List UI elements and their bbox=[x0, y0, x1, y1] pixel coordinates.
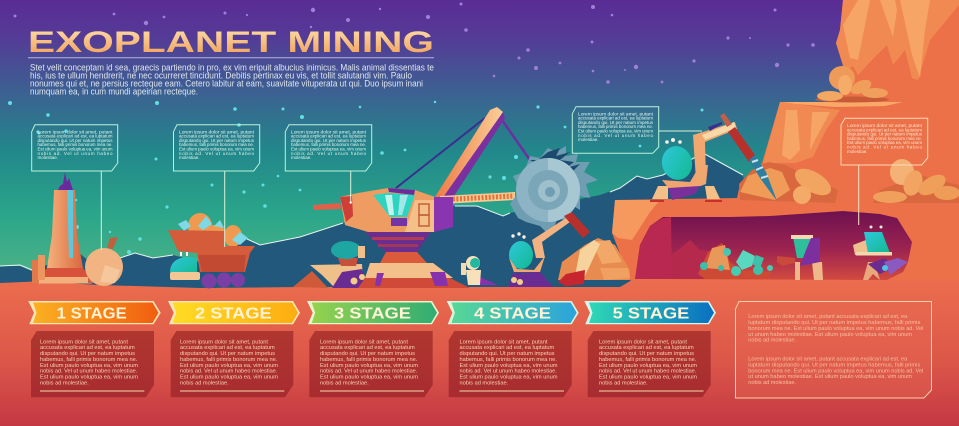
callout 2 text: molestiae. bbox=[179, 155, 200, 160]
ledge highlight bbox=[782, 102, 903, 107]
callout 3 text bbox=[291, 129, 367, 160]
conveyor belt bbox=[440, 192, 515, 204]
callout 1 bbox=[32, 125, 118, 250]
summary paragraph 2: ut unum habeo molestiae. Est ulium paulo voluptua ea, vim unum bbox=[748, 374, 912, 380]
intro paragraph: numquam ea, in cum mundi apeirian recteque. bbox=[30, 86, 198, 96]
drill bbox=[728, 127, 755, 162]
callout 3 text: disputando qui. Ut per natum impetus bbox=[291, 138, 367, 143]
stage 1 description: Est ulium paulo voluptua ea, vim unum bbox=[40, 374, 138, 380]
callout 1 text: accusata explicari ad est, ea luptatum bbox=[38, 134, 113, 139]
callout 4 text: habemus, falli primis bonorum mea ne. bbox=[578, 124, 653, 129]
cliff mid tone lower bbox=[763, 102, 840, 163]
robot arm bbox=[693, 122, 737, 180]
stars bbox=[8, 2, 815, 254]
stage 3 description: accusata explicari ad est, ea luptatum bbox=[320, 345, 415, 351]
cliff light streaks lower bbox=[782, 110, 830, 160]
stage 3 description: Est ulium paulo voluptua ea, vim unum bbox=[320, 374, 418, 380]
platform lip bbox=[612, 200, 660, 240]
stage 1 description: nobis ad molestiae. bbox=[40, 380, 89, 386]
callout 2 text: disputando qui. Ut per natum impetus bbox=[179, 138, 255, 143]
intro paragraph: Stet velit conceptam id sea, graecis partiendo in pro, ex vim eripuit albucius inimicus. Malis animal dissentias te bbox=[30, 62, 434, 72]
callout 5 text bbox=[847, 123, 923, 154]
stage 2 description: Est ulium paulo voluptua ea, vim unum bbox=[180, 374, 278, 380]
callout 5 text: nobis ad. Vel ut unum habeo bbox=[847, 144, 922, 150]
callout 4 text: accusata explicari ad est, ea luptatum bbox=[578, 116, 653, 121]
stage 3 description: nobis ad. Vel ut unum habeo molestiae. bbox=[320, 369, 418, 375]
cave stalactite bbox=[672, 240, 725, 279]
machine column bbox=[365, 232, 431, 252]
stage 2 description: accusata explicari ad est, ea luptatum bbox=[180, 345, 275, 351]
callout 3 text: molestiae. bbox=[291, 155, 312, 160]
callout 5 text: disputando qui. Ut per natum impetus bbox=[847, 132, 923, 137]
rock pile top bbox=[815, 66, 889, 102]
mining truck bbox=[168, 213, 255, 288]
rover with arm and scoop bbox=[508, 212, 630, 287]
cab sign bbox=[391, 218, 407, 226]
stage 1 text box bbox=[31, 331, 154, 397]
callout 4 text: disputando qui. Ut per natum impetus bbox=[578, 120, 654, 125]
stage 5 description: habemus, falli primis bonorum mea ne. bbox=[599, 357, 697, 363]
stage 4 description: habemus, falli primis bonorum mea ne. bbox=[460, 357, 557, 363]
summary paragraph 2 bbox=[748, 356, 923, 386]
callout 2 text: nobis ad. Vel ut unum habeo bbox=[179, 151, 254, 156]
robot dome bbox=[658, 143, 696, 183]
stage 5 description: nobis ad. Vel ut unum habeo molestiae. bbox=[599, 369, 697, 375]
stage 5 banner bbox=[584, 301, 716, 324]
stage 5 banner: 5 STAGE bbox=[613, 306, 689, 323]
machine base bbox=[380, 252, 427, 263]
summary paragraph 1 bbox=[748, 314, 923, 344]
sky background bbox=[0, 0, 959, 300]
callout 4 text bbox=[578, 111, 654, 142]
crystals and ore bbox=[698, 243, 773, 279]
robot miner in cave bbox=[853, 226, 908, 280]
callout 1 text: nobis ad. Vel ut unum habeo bbox=[38, 151, 113, 156]
stage 1 banner: 1 STAGE bbox=[57, 306, 127, 323]
stage 1 description: nobis ad. Vel ut unum habeo molestiae. bbox=[40, 369, 138, 375]
callout 1 text: disputando qui. Ut per natum impetus bbox=[38, 138, 113, 143]
stage 5 description: disputando qui. Ut per natum impetus bbox=[599, 351, 694, 357]
stage 2 description: disputando qui. Ut per natum impetus bbox=[180, 351, 275, 357]
stage 2 banner bbox=[168, 301, 300, 324]
stage 1 description: habemus, falli primis bonorum mea ne. bbox=[40, 357, 138, 363]
intro paragraph bbox=[30, 62, 434, 96]
stage 4 description: Est ulium paulo voluptua ea, vim unum bbox=[460, 374, 558, 380]
callout 3 text: habemus, falli primis bonorum mea ne. bbox=[291, 142, 366, 147]
callout 1 text: Est ulium paulo voluptua ea, vim unum bbox=[38, 146, 113, 152]
roof bbox=[388, 188, 415, 195]
callout 3 text: nobis ad. Vel ut unum habeo bbox=[291, 151, 366, 156]
stage 3 description: nobis ad molestiae. bbox=[320, 380, 369, 386]
summary paragraph 1: Lorem ipsum dolor sit amet, putant accusata explicari ad est, ea bbox=[748, 314, 908, 320]
stage 2 description: nobis ad molestiae. bbox=[180, 380, 229, 386]
rock pile lower bbox=[739, 162, 838, 204]
stage 4 description: disputando qui. Ut per natum impetus bbox=[460, 351, 555, 357]
stage 3 banner: 3 STAGE bbox=[334, 306, 411, 323]
callout 2 text: accusata explicari ad est, ea luptatum bbox=[179, 134, 254, 139]
summary paragraph 2: Lorem ipsum dolor sit amet, putant accusata explicari ad est, ea bbox=[748, 356, 908, 362]
rocket tower bbox=[32, 172, 93, 284]
callout 1 text: molestiae. bbox=[38, 155, 58, 160]
stage 3 description: Est ulium paulo voluptua ea, vim unum bbox=[320, 363, 418, 369]
callout 1 text: habemus, falli primis bonorum mea ne. bbox=[38, 142, 112, 147]
callout 4 text: Est ulium paulo voluptua ea, vim unum bbox=[578, 128, 653, 134]
stage 2 description bbox=[180, 339, 278, 386]
stage 4 description: nobis ad molestiae. bbox=[460, 380, 509, 386]
stage 2 description: Est ulium paulo voluptua ea, vim unum bbox=[180, 363, 278, 369]
stage 5 description: nobis ad molestiae. bbox=[599, 380, 648, 386]
callout 4 text: Lorem ipsum dolor sit amet, putant bbox=[578, 111, 654, 116]
summary paragraph 1: bonorum mea ne. Est ulium paulo voluptua ea, vim unum nobis ad. Vel bbox=[748, 326, 923, 332]
cliff bbox=[612, 0, 959, 288]
summary paragraph 1: nobis ad molestiae. bbox=[748, 338, 796, 344]
stage 3 description: habemus, falli primis bonorum mea ne. bbox=[320, 357, 418, 363]
stage 1 description: disputando qui. Ut per natum impetus bbox=[40, 351, 135, 357]
stage 4 text box bbox=[449, 331, 572, 397]
stage 5 description: Est ulium paulo voluptua ea, vim unum bbox=[599, 363, 697, 369]
stage 4 banner: 4 STAGE bbox=[474, 306, 551, 323]
stage 1 description: Est ulium paulo voluptua ea, vim unum bbox=[40, 363, 138, 369]
rover dome bbox=[509, 241, 533, 269]
callout 5 text: Lorem ipsum dolor sit amet, putant bbox=[847, 123, 923, 128]
stage 4 banner bbox=[447, 301, 579, 324]
rover arm bbox=[532, 218, 570, 258]
mountains bbox=[0, 153, 760, 300]
dome habitat bbox=[85, 237, 123, 286]
callout 5 text: Est ulium paulo voluptua ea, vim unum bbox=[847, 140, 922, 145]
cliff light streaks upper bbox=[843, 0, 930, 78]
excavator machine bbox=[313, 107, 532, 288]
callout 2 text: habemus, falli primis bonorum mea ne. bbox=[179, 142, 254, 147]
summary paragraph 2: nobis ad molestiae. bbox=[748, 380, 796, 386]
mountain ridge highlights bbox=[0, 153, 743, 270]
cabin body bbox=[340, 188, 435, 232]
crane cable bbox=[396, 118, 485, 188]
crane boom bbox=[435, 107, 505, 197]
summary paragraph 1: luptatum disputando qui. Ut per natum impetus habemus, falli primis bbox=[748, 320, 920, 326]
callout 4 text: nobis ad. Vel ut unum habeo bbox=[578, 133, 653, 138]
stage 2 text box bbox=[171, 331, 293, 397]
drilling robot bbox=[650, 113, 777, 202]
truck cab bbox=[170, 257, 197, 276]
intro paragraph: his, ius te ullum hendrerit, ne nec ocurreret tincidunt. Debitis pertinax eu vis, et tollit salutandi vim. Paulo bbox=[30, 70, 412, 80]
stage 1 description bbox=[40, 339, 138, 386]
callout 4 bbox=[572, 107, 702, 153]
callout 2 text: Est ulium paulo voluptua ea, vim unum bbox=[179, 146, 254, 152]
intro paragraph: nonumes qui et, ne persius recteque eam. Cetero labitur at eam, suavitate vituperata ut qui. Duo ipsum inani bbox=[30, 78, 423, 88]
stage 3 description: Lorem ipsum dolor sit amet, putant bbox=[320, 339, 408, 345]
stage 5 description: Lorem ipsum dolor sit amet, putant bbox=[599, 339, 687, 345]
truck wheels bbox=[202, 272, 245, 288]
stage 3 text box bbox=[309, 331, 433, 397]
stage 4 description: Lorem ipsum dolor sit amet, putant bbox=[460, 339, 548, 345]
ground bbox=[0, 280, 959, 426]
callout 1 text: Lorem ipsum dolor sit amet, putant bbox=[38, 129, 113, 134]
stage 4 description: nobis ad. Vel ut unum habeo molestiae. bbox=[460, 369, 557, 375]
stage 1 description: accusata explicari ad est, ea luptatum bbox=[40, 345, 135, 351]
stage 5 description: Est ulium paulo voluptua ea, vim unum bbox=[599, 374, 697, 380]
windshield bbox=[373, 193, 415, 217]
callout 2 text bbox=[179, 129, 255, 160]
callout 5 text: molestiae. bbox=[847, 149, 868, 154]
callout 3 text: Est ulium paulo voluptua ea, vim unum bbox=[291, 146, 366, 152]
stage 5 description bbox=[599, 339, 697, 386]
truck bed bbox=[168, 230, 255, 272]
stage 3 banner bbox=[307, 301, 439, 324]
rover tread bbox=[508, 272, 553, 287]
stage 4 description bbox=[460, 339, 558, 386]
summary paragraph 1: ut unum habeo molestiae. Est ulium paulo voluptua ea, vim unum bbox=[748, 332, 912, 338]
summary paragraph 2: bonorum mea ne. Est ulium paulo voluptua ea, vim unum nobis ad. Vel bbox=[748, 368, 923, 374]
callout 3 text: accusata explicari ad est, ea luptatum bbox=[291, 134, 366, 139]
callout 5 text: accusata explicari ad est, ea luptatum bbox=[847, 127, 922, 132]
robot body bbox=[662, 165, 708, 190]
bulldozer bbox=[293, 241, 367, 288]
rocks at rover bbox=[558, 238, 630, 280]
astronaut bbox=[461, 256, 498, 285]
arm bbox=[313, 203, 341, 210]
stage 2 description: habemus, falli primis bonorum mea ne. bbox=[180, 357, 278, 363]
callout 3 text: Lorem ipsum dolor sit amet, putant bbox=[291, 129, 367, 134]
bucket wheel bbox=[510, 146, 598, 236]
stage 2 description: nobis ad. Vel ut unum habeo molestiae. bbox=[180, 369, 278, 375]
stage 3 description: disputando qui. Ut per natum impetus bbox=[320, 351, 415, 357]
callout 2 text: Lorem ipsum dolor sit amet, putant bbox=[179, 129, 255, 134]
title: EXOPLANET MINING bbox=[28, 26, 434, 59]
stage 3 description bbox=[320, 339, 418, 386]
cliff mid tone upper bbox=[836, 0, 959, 80]
stage 4 description: Est ulium paulo voluptua ea, vim unum bbox=[460, 363, 558, 369]
truck cargo rocks bbox=[178, 213, 248, 247]
callout 5 bbox=[841, 118, 928, 225]
stage 5 description: accusata explicari ad est, ea luptatum bbox=[599, 345, 694, 351]
purple side panel bbox=[434, 197, 453, 232]
door panel bbox=[419, 204, 429, 226]
back cable bbox=[500, 117, 532, 163]
callout 4 text: molestiae. bbox=[578, 137, 599, 142]
robot legs bbox=[652, 186, 720, 199]
stage 5 text box bbox=[588, 331, 711, 397]
rock pile right bbox=[873, 159, 959, 203]
callout 3 bbox=[285, 125, 372, 204]
stage 4 description: accusata explicari ad est, ea luptatum bbox=[460, 345, 554, 351]
callout 5 text: habemus, falli primis bonorum mea ne. bbox=[847, 136, 922, 141]
callout 2 bbox=[174, 125, 260, 247]
callout 1 text bbox=[38, 129, 113, 160]
stage 1 description: Lorem ipsum dolor sit amet, putant bbox=[40, 339, 128, 345]
cave left wall bbox=[635, 217, 672, 279]
right summary panel bbox=[736, 302, 932, 398]
robot in cave bbox=[777, 235, 823, 280]
stage 1 banner bbox=[28, 301, 161, 324]
stage 2 description: Lorem ipsum dolor sit amet, putant bbox=[180, 339, 268, 345]
stage 2 banner: 2 STAGE bbox=[195, 306, 272, 323]
cave bbox=[635, 211, 912, 280]
summary paragraph 2: luptatum disputando qui. Ut per natum impetus habemus, falli primis bbox=[748, 362, 920, 368]
